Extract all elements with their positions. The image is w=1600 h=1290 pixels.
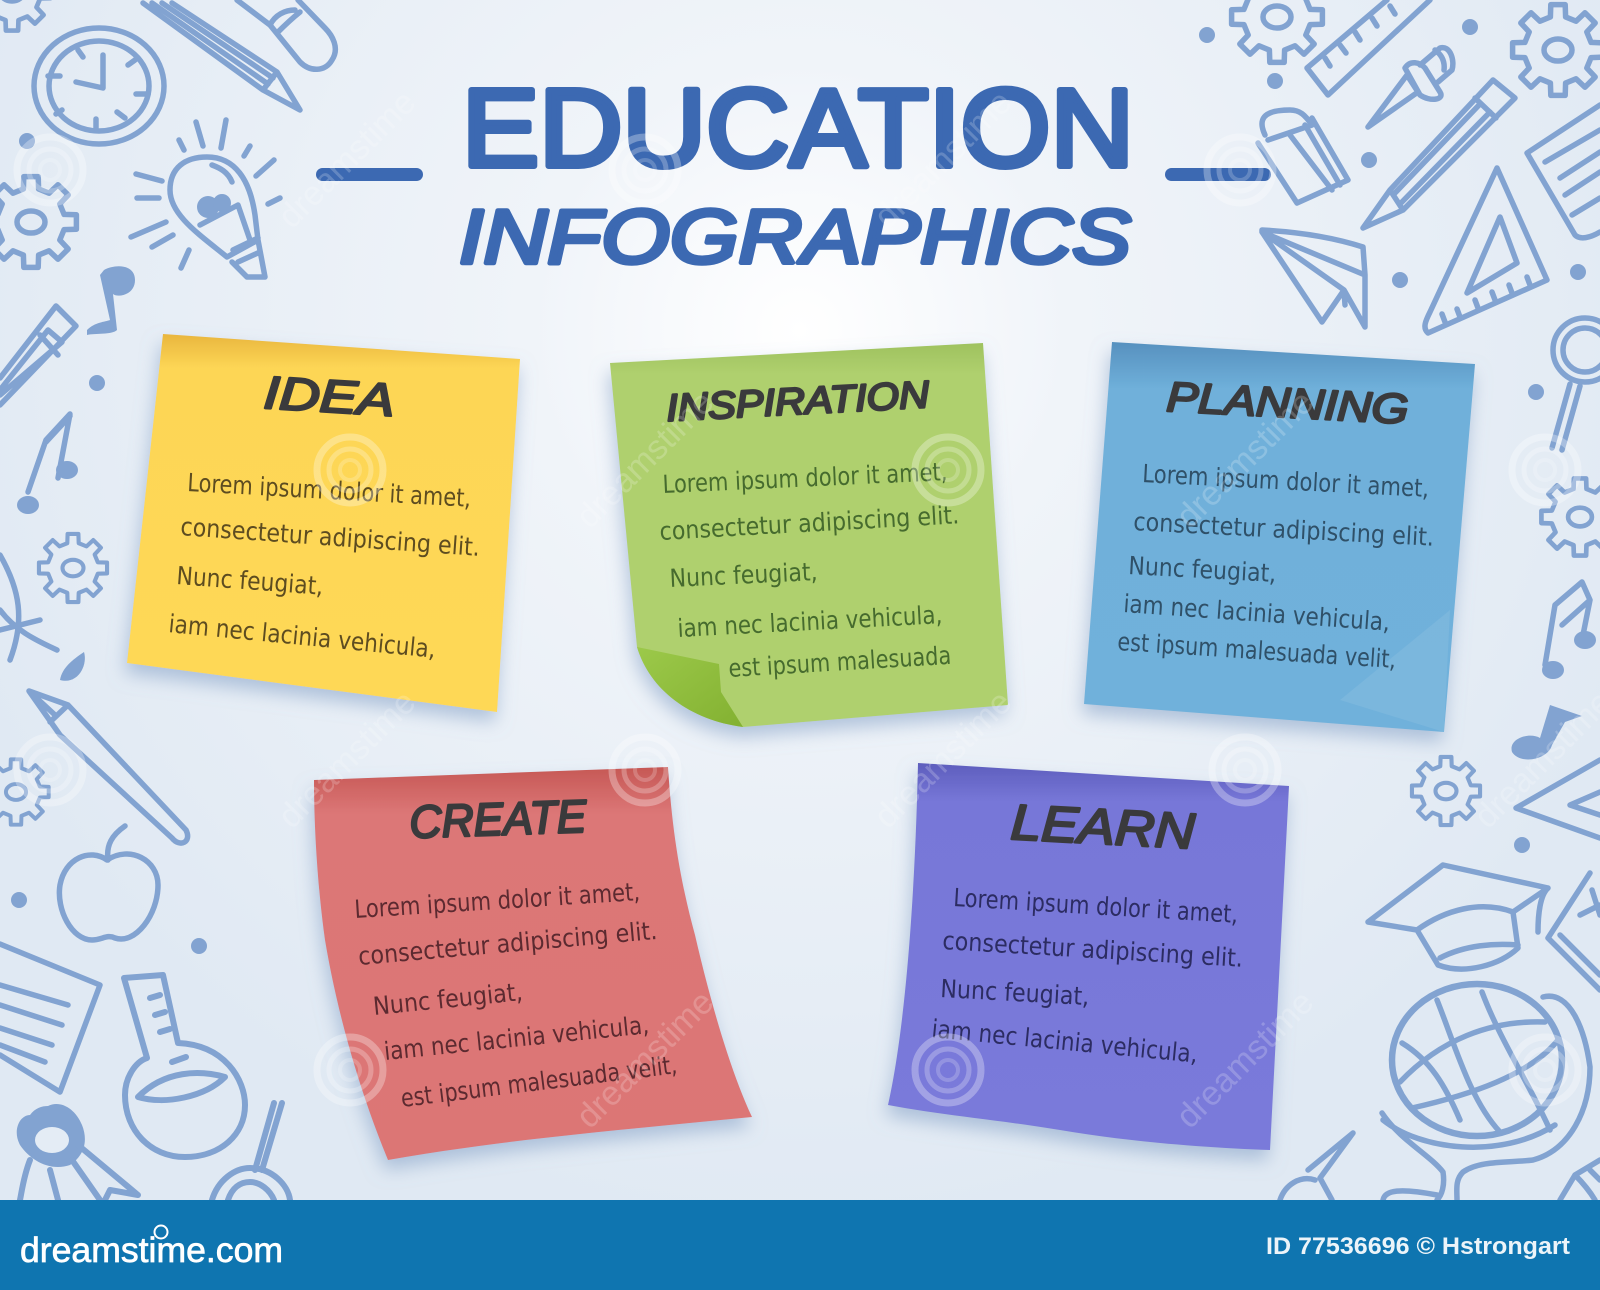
icon: pencil left [0,306,76,405]
note body text: consectetur adipiscing elit. [180,512,481,562]
title dash left [316,168,423,181]
note body text: iam nec lacinia vehicula, [930,1014,1199,1069]
note body text: Nunc feugiat, [176,561,324,601]
icon: paper plane [1262,230,1365,327]
curled corner [637,647,743,727]
icon: gear top-left [0,0,51,31]
icon: dna [0,555,57,660]
dots right [1199,19,1586,853]
icon: notepad right [1527,105,1600,238]
icon: ruler [1307,0,1430,95]
watermark overlay: dreamstime [867,683,1019,836]
watermark overlay: dreamstime [271,683,423,836]
panel: inspiration [610,343,1008,727]
note sheet [1084,342,1475,732]
footer bar [0,1200,1600,1290]
icon: paint brush [29,691,188,843]
note body text: Lorem ipsum dolor it amet, [953,883,1239,929]
note body text: iam nec lacinia vehicula, [677,600,943,643]
note heading: CREATE [409,790,589,848]
note body text: Nunc feugiat, [669,557,818,593]
note heading: LEARN [1009,794,1197,860]
icons: right doodle column [1199,0,1600,1200]
note body text: Lorem ipsum dolor it amet, [187,468,472,513]
note sheet [314,767,752,1160]
note body text [1117,459,1435,674]
icon: gear small [39,534,107,602]
icon: notepad [0,944,100,1092]
note body text: iam nec lacinia vehicula, [383,1010,650,1066]
icon: drop [60,652,85,681]
icon: round flask [124,975,245,1157]
panel: planning [1084,342,1475,732]
icon: marker top [237,0,335,69]
icon: sharpener [1258,110,1348,203]
panel: idea [127,334,520,712]
note body text [930,883,1244,1069]
title dash right [1165,168,1271,181]
note sheet [127,334,520,712]
icon: gear mid right [1541,478,1600,556]
note heading: INSPIRATION [665,374,931,430]
note body text: consectetur adipiscing elit. [659,500,960,546]
note body text [354,877,679,1113]
title [316,67,1271,280]
watermark overlay: dreamstime [569,383,721,536]
note body text: est ipsum malesuada velit, [399,1050,679,1113]
note body text: est ipsum malesuada velit, [1117,627,1397,674]
note body text: Nunc feugiat, [372,977,524,1021]
icon: magnifier right [1552,318,1600,450]
dots left [11,133,207,954]
note sheet [888,763,1289,1150]
note body text: consectetur adipiscing elit. [1133,507,1435,552]
watermark overlay: dreamstime [1169,383,1321,536]
panel: create [314,767,752,1160]
icon: set square [1425,168,1547,333]
note body text: consectetur adipiscing elit. [357,916,658,971]
icon: magnifier bottom [212,1103,290,1200]
note body text [167,468,481,664]
icon: push pin [1368,48,1453,127]
icon: globe [1392,984,1562,1136]
note body text: iam nec lacinia vehicula, [1123,589,1391,637]
heading: infographics: INFOGRAPHICS [459,195,1131,280]
panel: learn [888,763,1289,1150]
icon: clock [34,28,164,144]
icon: pencil large [1363,80,1515,228]
note sheet [610,343,1008,727]
icon: pencil top [143,3,300,110]
icon: book [1548,873,1600,990]
icon: gear small right [1412,757,1480,825]
note body text: Lorem ipsum dolor it amet, [662,457,948,499]
icon: gear top [1232,0,1322,62]
note heading: PLANNING [1166,373,1410,433]
icon: rosette [17,1104,138,1200]
note body text: Lorem ipsum dolor it amet, [1142,459,1430,503]
note body text: Lorem ipsum dolor it amet, [354,877,641,924]
icon: double music note [17,414,78,514]
icon: double music note right [1542,582,1596,679]
footer logo: dreamstime.com [20,1231,283,1270]
note body text: Nunc feugiat, [940,974,1090,1011]
icon: gear left [0,177,76,267]
footer credit: ID 77536696 © Hstrongart [1266,1233,1570,1260]
note body text: iam nec lacinia vehicula, [167,609,437,664]
icon: drawing pin bottom [1280,1133,1353,1200]
watermark overlay: dreamstime [867,83,1019,236]
icon: light bulb [131,120,280,277]
watermark overlay: dreamstime [569,983,721,1136]
watermark overlay: dreamstime [1169,983,1321,1136]
icon: graduation cap [1368,865,1548,969]
heading: education: EDUCATION [462,67,1134,190]
icon: gear top-right [1513,5,1600,95]
icon: globe stand [1382,996,1590,1200]
icon: pin bottom right [1560,1160,1600,1200]
note body text: est ipsum malesuada [728,641,952,683]
icon: gear lower left [0,759,49,825]
icons: left doodle column [0,0,335,1200]
note heading: IDEA [262,366,396,426]
icon: triangle right [1516,760,1600,838]
note body text: consectetur adipiscing elit. [942,926,1244,973]
icon: music note [87,266,135,335]
watermark overlay: dreamstime [271,83,423,236]
icon: music note right [1512,705,1582,759]
icon: apple [59,826,158,940]
note body text [659,457,960,683]
note body text: Nunc feugiat, [1128,551,1277,588]
glossy corner highlight [1340,610,1450,732]
